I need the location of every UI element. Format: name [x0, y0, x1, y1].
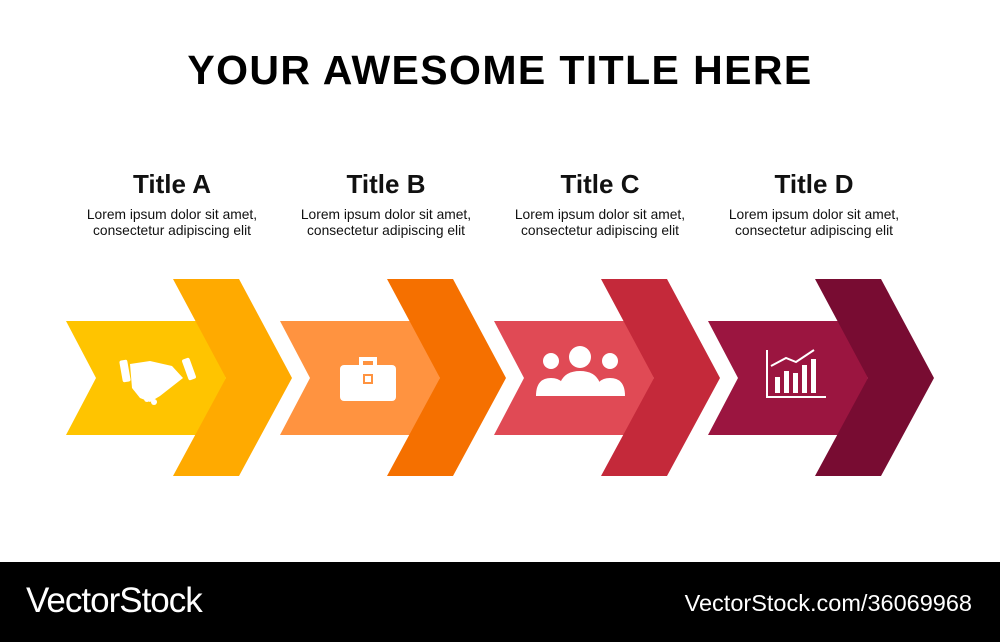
- icon: handshake: [119, 357, 197, 405]
- footer url: VectorStock.com/36069968: [685, 590, 972, 616]
- text: Title B: Title B: [346, 169, 425, 199]
- text: Title C: Title C: [560, 169, 639, 199]
- text: Title B: Lorem ipsum dolor sit amet,: [301, 207, 471, 222]
- text: Title D: Title D: [774, 169, 853, 199]
- arrow C: [494, 279, 720, 476]
- text: Title C: consectetur adipiscing elit: [521, 223, 679, 238]
- text: Title A: [87, 169, 257, 238]
- text: Title A: Title A: [133, 169, 211, 199]
- footer logo: VectorStock: [26, 581, 202, 620]
- text: Title B: consectetur adipiscing elit: [307, 223, 465, 238]
- icon: people: [536, 346, 625, 396]
- title: YOUR AWESOME TITLE HERE: [187, 47, 813, 93]
- text: Title A: Lorem ipsum dolor sit amet,: [87, 207, 257, 222]
- arrow D: [708, 279, 934, 476]
- icon: chart: [767, 350, 826, 397]
- arrow A: [66, 279, 292, 476]
- text: Title C: Lorem ipsum dolor sit amet,: [515, 207, 685, 222]
- text: Title A: consectetur adipiscing elit: [93, 223, 251, 238]
- text: Title D: [729, 169, 899, 238]
- icon: briefcase: [340, 357, 396, 401]
- text: Title D: consectetur adipiscing elit: [735, 223, 893, 238]
- arrow B: [280, 279, 506, 476]
- text: Title C: [515, 169, 685, 238]
- text: Title B: [301, 169, 471, 238]
- text: Title D: Lorem ipsum dolor sit amet,: [729, 207, 899, 222]
- footer: [0, 562, 1000, 642]
